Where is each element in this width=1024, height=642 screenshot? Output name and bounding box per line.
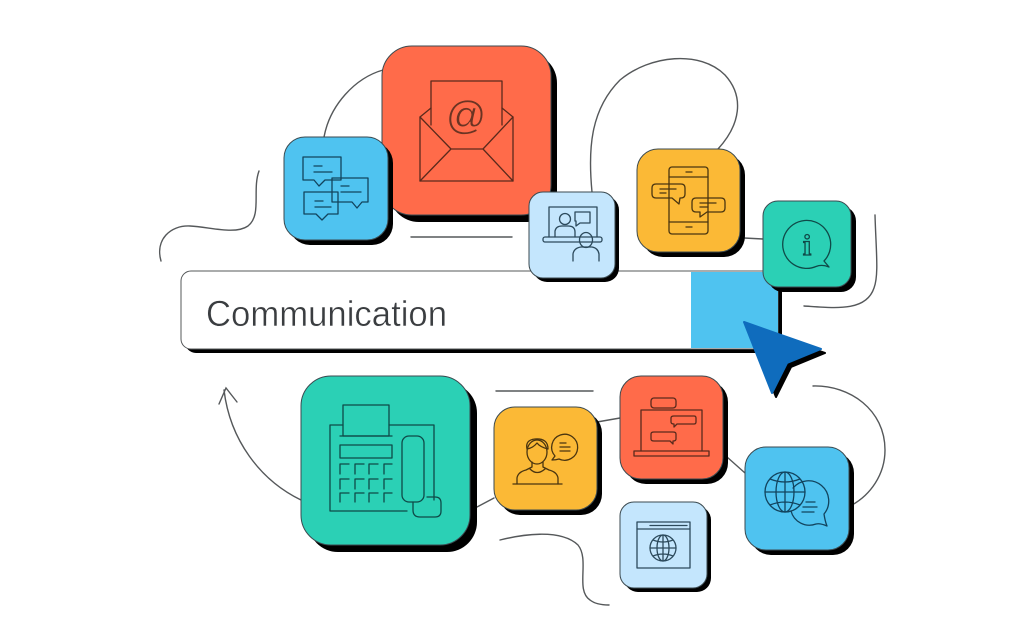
tile: chat bubbles bbox=[284, 137, 393, 245]
tile: fax machine bbox=[301, 376, 477, 552]
icon: three message bubbles bbox=[303, 157, 368, 220]
icon: envelope with at sign bbox=[420, 81, 513, 181]
tile: web browser bbox=[620, 502, 711, 592]
connector lines and squiggles bbox=[160, 59, 885, 605]
icon: person with speech bubble bbox=[513, 434, 578, 484]
search button bbox=[691, 272, 778, 348]
icon: info speech bubble: i bbox=[803, 229, 811, 262]
icon: browser window with globe bbox=[637, 522, 690, 568]
search bar bbox=[181, 271, 782, 353]
tile: global chat bbox=[745, 447, 854, 555]
icon: envelope with at sign: @ bbox=[446, 94, 486, 138]
cursor arrow bbox=[744, 322, 825, 397]
tile: person speaking bbox=[494, 407, 602, 515]
tile: smartphone messages bbox=[637, 149, 745, 257]
icon: laptop with messages bbox=[634, 398, 709, 456]
tile: information bbox=[763, 201, 856, 292]
arrow: curved return arrow bbox=[219, 388, 301, 500]
icon: video call participants bbox=[543, 207, 602, 261]
tile: email envelope bbox=[382, 46, 557, 222]
icon: fax machine bbox=[330, 405, 441, 517]
icon: globe with speech bubble bbox=[765, 472, 829, 526]
icon: phone with bubbles bbox=[652, 167, 725, 234]
search text: Communication bbox=[206, 293, 447, 334]
tile: laptop chat bbox=[620, 376, 728, 484]
tile: video call bbox=[529, 192, 619, 282]
